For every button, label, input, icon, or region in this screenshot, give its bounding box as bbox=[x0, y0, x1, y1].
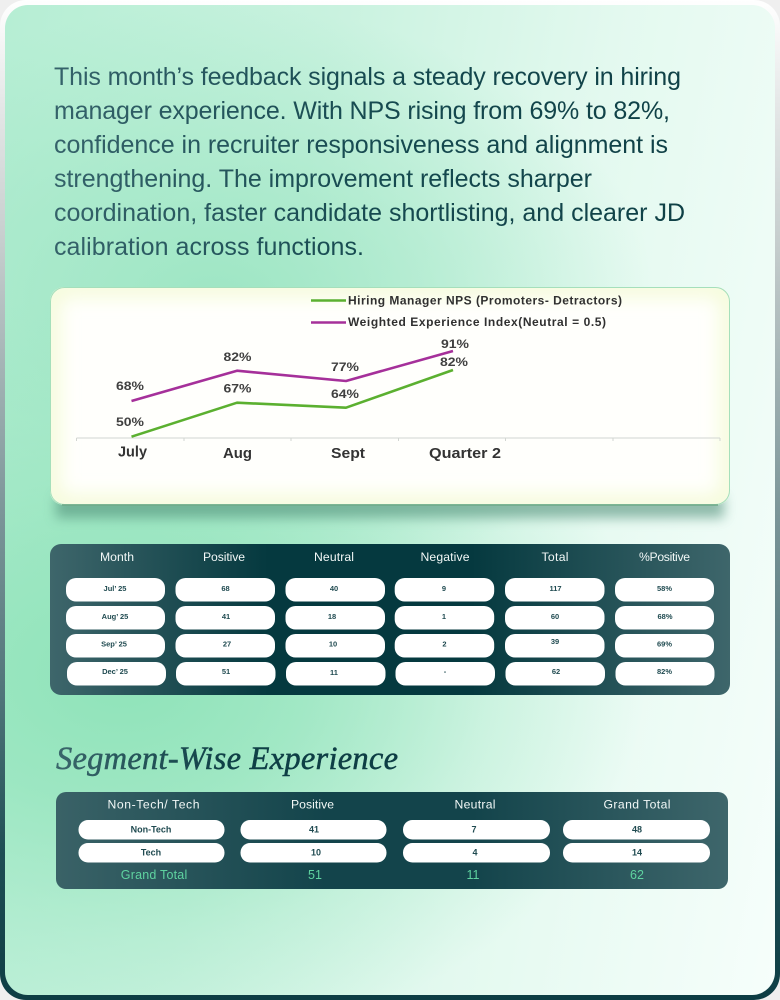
row: Jul 25: 40 bbox=[330, 584, 338, 593]
line: hiring manager NPS: 50% bbox=[116, 415, 144, 429]
intro paragraph: This month’s feedback signals a steady recovery in hiring bbox=[54, 63, 681, 91]
table header: Month bbox=[100, 550, 134, 564]
row: Jul 25: Jul’ 25 bbox=[104, 584, 126, 593]
intro paragraph bbox=[54, 63, 685, 261]
row: Sep 25: 27 bbox=[223, 640, 231, 648]
table header: Negative bbox=[420, 550, 470, 564]
table header: Neutral bbox=[314, 550, 354, 564]
segment table header: Positive bbox=[291, 798, 334, 812]
intro paragraph: coordination, faster candidate shortlisting, and clearer JD bbox=[54, 199, 685, 227]
row: Tech bbox=[78, 843, 710, 862]
line: weighted experience index: 77% bbox=[331, 360, 359, 374]
line: hiring manager NPS: 67% bbox=[224, 382, 252, 396]
chart legend bbox=[311, 294, 622, 329]
line: weighted experience index: 91% bbox=[441, 337, 469, 351]
chart axis: Quarter 2 bbox=[429, 446, 501, 462]
row: Aug 25: 41 bbox=[222, 612, 230, 621]
row: grand total bbox=[121, 868, 644, 882]
table header: %Positive bbox=[639, 550, 690, 564]
panel: line chart bbox=[50, 287, 730, 518]
heading: segment-wise experience: Segment-Wise Experience bbox=[56, 741, 398, 777]
row: Aug 25 bbox=[66, 606, 714, 630]
row: Non-Tech: 41 bbox=[309, 824, 319, 834]
row: Dec 25: Dec’ 25 bbox=[102, 667, 128, 676]
row: Aug 25: Aug’ 25 bbox=[102, 612, 128, 621]
intro paragraph: confidence in recruiter responsiveness and alignment is bbox=[54, 131, 668, 159]
segment table header: Non-Tech/ Tech bbox=[108, 798, 200, 812]
row: Aug 25: 68% bbox=[657, 612, 673, 621]
chart axis: July bbox=[118, 444, 147, 460]
row: Dec 25: 82% bbox=[657, 667, 672, 676]
row: Sep 25: 10 bbox=[329, 640, 337, 648]
chart legend: Hiring Manager NPS (Promoters- Detractors) bbox=[348, 294, 622, 308]
row: Dec 25 bbox=[67, 662, 714, 686]
segment table header: Grand Total bbox=[604, 798, 670, 812]
row: Jul 25: 9 bbox=[442, 584, 446, 593]
row: Sep 25: 2 bbox=[442, 640, 447, 648]
chart axis: Aug bbox=[223, 446, 252, 462]
row: Non-Tech: 48 bbox=[632, 824, 642, 834]
intro paragraph: calibration across functions. bbox=[54, 233, 364, 261]
row: Non-Tech: 7 bbox=[471, 824, 477, 834]
row: Jul 25: 68 bbox=[221, 584, 230, 593]
row: grand total: 51 bbox=[308, 868, 322, 882]
row: Sep 25 bbox=[66, 634, 714, 658]
row: Sep 25: 39 bbox=[551, 637, 559, 646]
line: hiring manager NPS: 82% bbox=[440, 355, 468, 369]
segment table header bbox=[108, 798, 670, 812]
row: Jul 25: 117 bbox=[549, 584, 562, 593]
row: Tech: 10 bbox=[311, 848, 321, 858]
row: Aug 25: 60 bbox=[551, 612, 559, 621]
table header: Positive bbox=[203, 550, 245, 564]
table header: Total bbox=[542, 550, 568, 564]
line: weighted experience index bbox=[116, 337, 469, 401]
row: grand total: 62 bbox=[630, 868, 644, 882]
row: Non-Tech bbox=[78, 820, 710, 840]
row: Aug 25: 1 bbox=[442, 612, 446, 621]
intro paragraph: manager experience. With NPS rising from 69% to 82%, bbox=[54, 97, 670, 125]
chart axis bbox=[76, 438, 720, 462]
row: Dec 25: 11 bbox=[330, 668, 338, 677]
row: Tech: Tech bbox=[141, 848, 161, 858]
panel: monthly feedback table bbox=[50, 544, 730, 695]
row: Dec 25: 51 bbox=[222, 667, 230, 676]
chart axis: Sept bbox=[331, 446, 365, 462]
table header bbox=[100, 550, 690, 564]
segment table header: Neutral bbox=[454, 798, 496, 812]
row: Tech: 14 bbox=[632, 848, 642, 858]
row: Non-Tech: Non-Tech bbox=[131, 824, 171, 834]
line: hiring manager NPS: 64% bbox=[331, 387, 359, 401]
line: hiring manager NPS bbox=[116, 355, 468, 437]
row: Dec 25: - bbox=[444, 667, 447, 676]
row: Aug 25: 18 bbox=[328, 612, 336, 621]
row: Dec 25: 62 bbox=[552, 667, 560, 676]
intro paragraph: strengthening. The improvement reflects sharper bbox=[54, 165, 592, 193]
line: weighted experience index: 82% bbox=[224, 350, 252, 364]
row: Tech: 4 bbox=[472, 848, 478, 858]
row: Sep 25: 69% bbox=[657, 640, 672, 648]
row: grand total: Grand Total bbox=[121, 868, 187, 882]
infographic content bbox=[50, 67, 732, 889]
line: weighted experience index: 68% bbox=[116, 379, 144, 393]
row: Jul 25 bbox=[66, 578, 714, 602]
panel: segment table bbox=[56, 792, 728, 889]
row: Sep 25: Sep’ 25 bbox=[101, 640, 127, 648]
row: Jul 25: 58% bbox=[657, 584, 672, 593]
chart legend: Weighted Experience Index(Neutral = 0.5) bbox=[348, 315, 606, 329]
row: grand total: 11 bbox=[467, 868, 480, 882]
